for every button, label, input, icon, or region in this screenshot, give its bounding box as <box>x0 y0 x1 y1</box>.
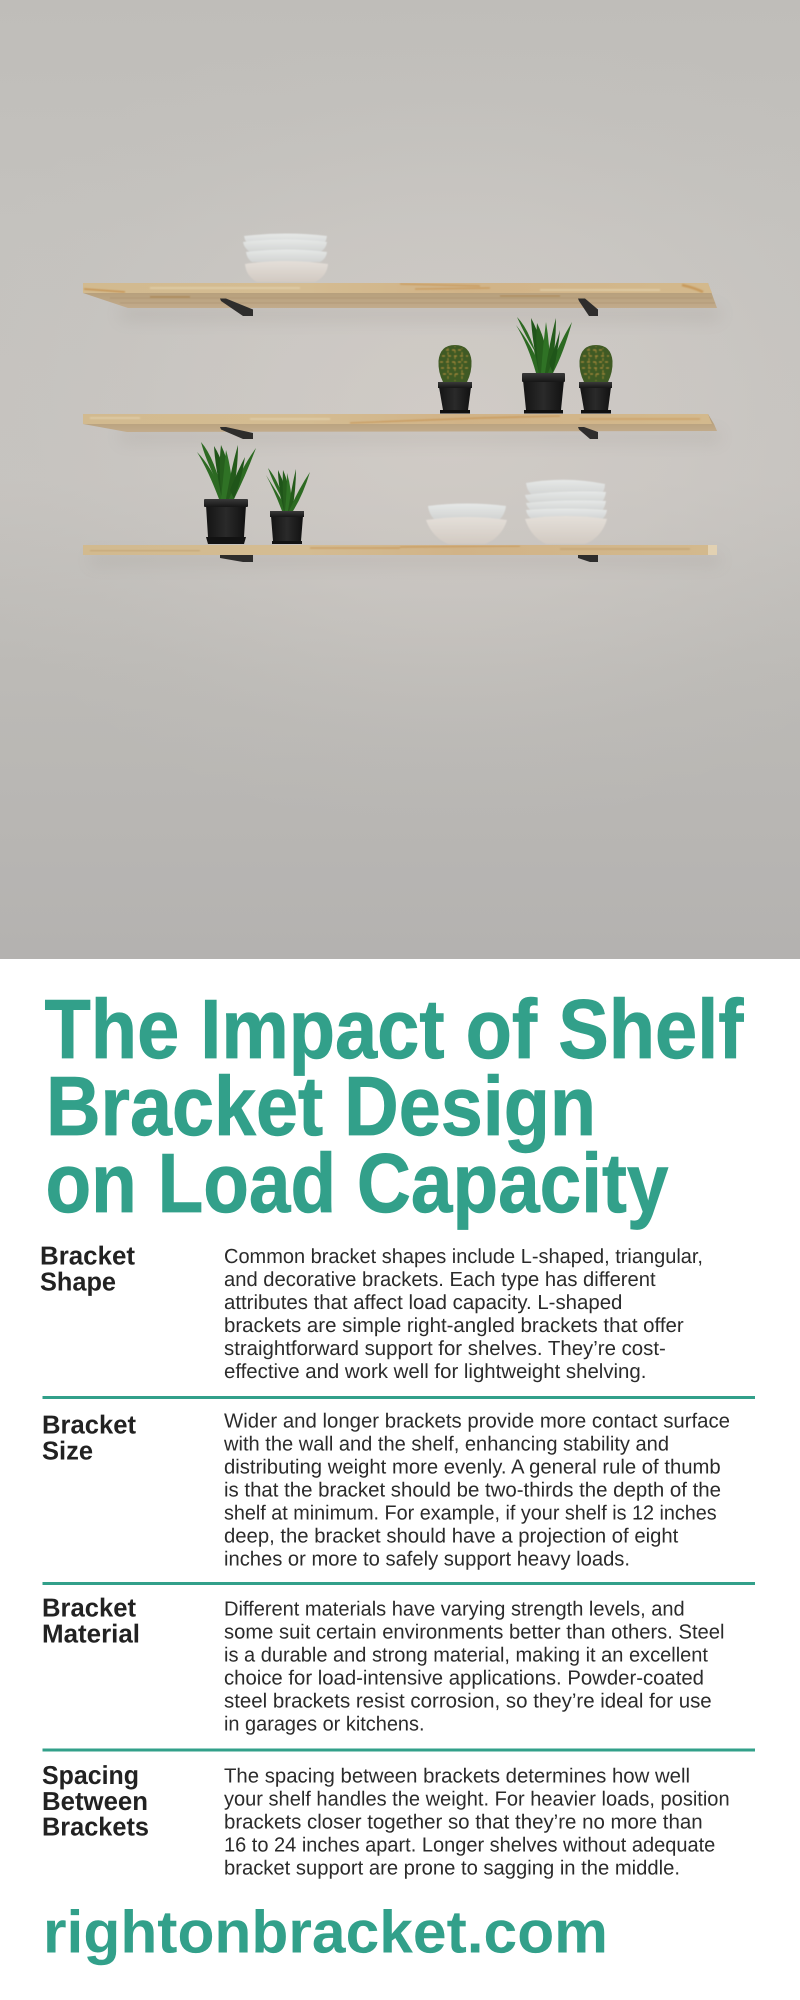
text: bracket shape description: effective and work well for lightweight shelving. <box>224 1361 646 1383</box>
heading: Spacing Between Brackets: Brackets <box>42 1812 149 1842</box>
text: bracket spacing description <box>224 1766 730 1880</box>
text: bracket shape description: brackets are simple right-angled brackets that offer <box>224 1315 684 1337</box>
title: The Impact of Shelf <box>44 982 744 1076</box>
title: on Load Capacity <box>46 1136 669 1230</box>
plant: left aloe <box>197 442 256 544</box>
text: bracket spacing description: your shelf handles the weight. For heavier loads, position <box>224 1789 730 1811</box>
plant: centre aloe <box>516 317 572 414</box>
text: bracket spacing description: 16 to 24 inches apart. Longer shelves without adequate <box>224 1835 715 1857</box>
shelf: bottom <box>83 545 717 555</box>
text: bracket spacing description: brackets closer together so that they’re no more than <box>224 1812 703 1834</box>
heading: Bracket Shape: Bracket <box>40 1240 135 1270</box>
heading: Bracket Material: Material <box>42 1619 140 1649</box>
text: bracket size description: with the wall and the shelf, enhancing stability and <box>223 1433 669 1455</box>
bowls: bottom shelf stack <box>525 480 607 544</box>
title: Bracket Design <box>46 1059 596 1153</box>
text: bracket size description: is that the bracket should be two-thirds the depth of the <box>224 1479 721 1501</box>
text: bracket size description: Wider and longer brackets provide more contact surface <box>224 1410 730 1432</box>
bowls: top shelf stack <box>243 234 328 282</box>
text: bracket material description: steel brackets resist corrosion, so they’re ideal for use <box>224 1690 712 1712</box>
text: bracket spacing description: bracket support are prone to sagging in the middle. <box>224 1858 680 1880</box>
text: bracket shape description: and decorative brackets. Each type has different <box>224 1269 656 1291</box>
text: bracket material description: is a durable and strong material, making it an excellent <box>224 1644 708 1666</box>
heading: Bracket Shape: Shape <box>40 1266 116 1296</box>
photo: wooden wall shelves <box>0 0 800 959</box>
heading: Bracket Size: Size <box>42 1436 93 1466</box>
heading: Bracket Shape <box>40 1240 135 1296</box>
heading: Spacing Between Brackets <box>42 1760 149 1842</box>
shelf: middle <box>83 414 717 432</box>
heading: Spacing Between Brackets: Spacing <box>42 1760 139 1790</box>
text: bracket material description: Different materials have varying strength levels, and <box>224 1598 685 1620</box>
text: bracket size description: shelf at minimum. For example, if your shelf is 12 inches <box>224 1502 717 1524</box>
heading: Bracket Material: Bracket <box>42 1593 136 1623</box>
heading: Bracket Size <box>42 1410 136 1466</box>
text: bracket size description <box>223 1410 730 1570</box>
text: bracket material description: choice for load-intensive applications. Powder-coated <box>224 1668 704 1690</box>
plant: small aloe <box>266 468 310 544</box>
plant: cactus left <box>438 345 472 414</box>
text: bracket shape description: Common bracket shapes include L-shaped, triangular, <box>224 1246 703 1268</box>
plant: cactus right <box>579 345 613 414</box>
text: bracket material description <box>224 1598 724 1736</box>
shelf: top <box>83 283 717 308</box>
text: bracket material description: some suit certain environments better than others. Steel <box>224 1622 724 1644</box>
text: bracket spacing description: The spacing between brackets determines how well <box>224 1766 690 1788</box>
heading: Spacing Between Brackets: Between <box>42 1786 148 1816</box>
text: bracket shape description <box>224 1246 703 1383</box>
text: bracket size description: inches or more to safely support heavy loads. <box>224 1548 630 1570</box>
bowls: bottom shelf pair <box>426 504 507 544</box>
text: bracket shape description: attributes that affect load capacity. L-shaped <box>224 1292 622 1314</box>
text: bracket size description: distributing weight more evenly. A general rule of thumb <box>224 1456 721 1478</box>
brackets <box>220 298 598 562</box>
text: bracket shape description: straightforward support for shelves. They’re cost- <box>224 1338 666 1360</box>
heading: Bracket Material <box>42 1593 140 1649</box>
website url: rightonbracket.com <box>43 1898 608 1966</box>
heading: Bracket Size: Bracket <box>42 1410 136 1440</box>
shelf shadows <box>90 308 720 565</box>
title <box>44 982 744 1230</box>
text: bracket material description: in garages or kitchens. <box>224 1714 424 1736</box>
text: bracket size description: deep, the bracket should have a projection of eight <box>224 1525 679 1547</box>
